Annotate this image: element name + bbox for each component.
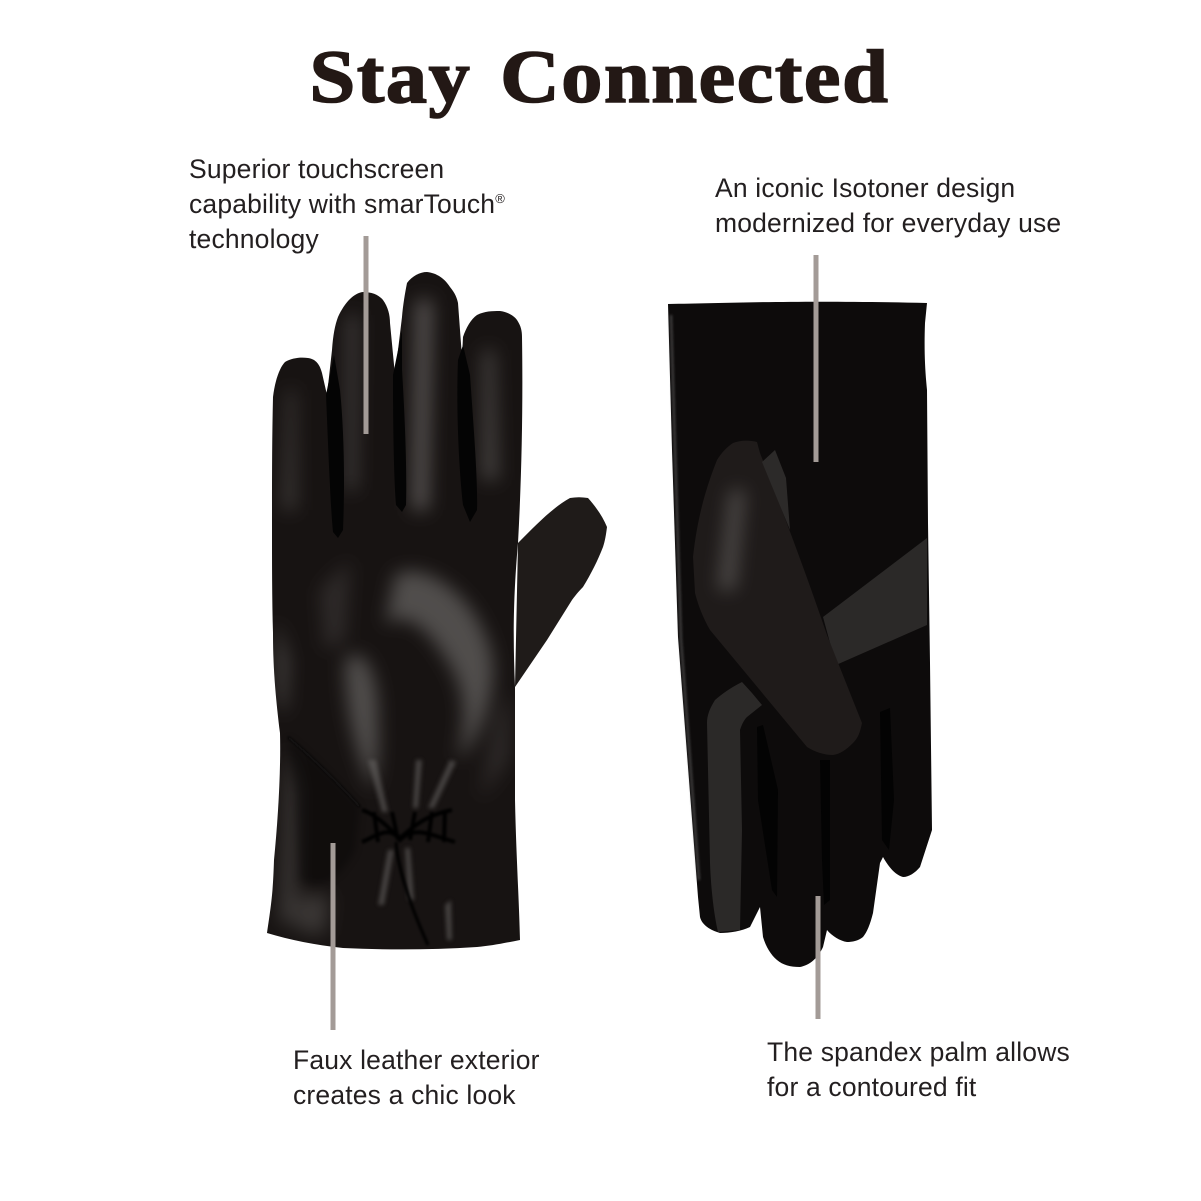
callout: faux leather: Faux leather exterior (293, 1045, 540, 1075)
line: design (814, 255, 818, 462)
leather highlights (276, 300, 510, 945)
finger gussets (326, 330, 477, 538)
palm body (668, 302, 932, 967)
lower leather panel (707, 682, 762, 932)
callout: faux leather (293, 1045, 540, 1110)
line: spandex (816, 896, 820, 1019)
thumb sheen (718, 490, 745, 590)
illustration: gloves (267, 236, 932, 1030)
callout: touchscreen: capability with smarTouch® (189, 189, 505, 219)
callout: touchscreen: Superior touchscreen (189, 154, 444, 184)
callout: design: An iconic Isotoner design (715, 173, 1015, 203)
callout lines (333, 236, 818, 1030)
callout: design (715, 173, 1061, 238)
hand body of back glove (267, 272, 522, 949)
thumb (693, 441, 862, 755)
glove back: faux leather (267, 272, 607, 949)
callout: spandex palm (767, 1037, 1070, 1102)
glove palm: spandex (333, 236, 932, 1030)
callout: spandex palm: The spandex palm allows (767, 1037, 1070, 1067)
line: leather (330, 843, 336, 1030)
callout: spandex palm: for a contoured fit (767, 1072, 976, 1102)
left edge sheen (671, 315, 699, 880)
callout: faux leather: creates a chic look (293, 1080, 516, 1110)
thumb side strip (762, 450, 790, 530)
leather stripe (823, 538, 927, 665)
dark panel of cuff (296, 759, 309, 874)
callout: design: modernized for everyday use (715, 208, 1061, 238)
gathered wrist ruching (368, 760, 456, 940)
callout: touchscreen (189, 154, 505, 254)
callout: touchscreen: technology (189, 224, 319, 254)
thumb of back glove (515, 497, 607, 687)
title: Stay Connected (310, 36, 889, 119)
finger gussets (757, 708, 894, 905)
line: touchscreen (364, 236, 368, 434)
